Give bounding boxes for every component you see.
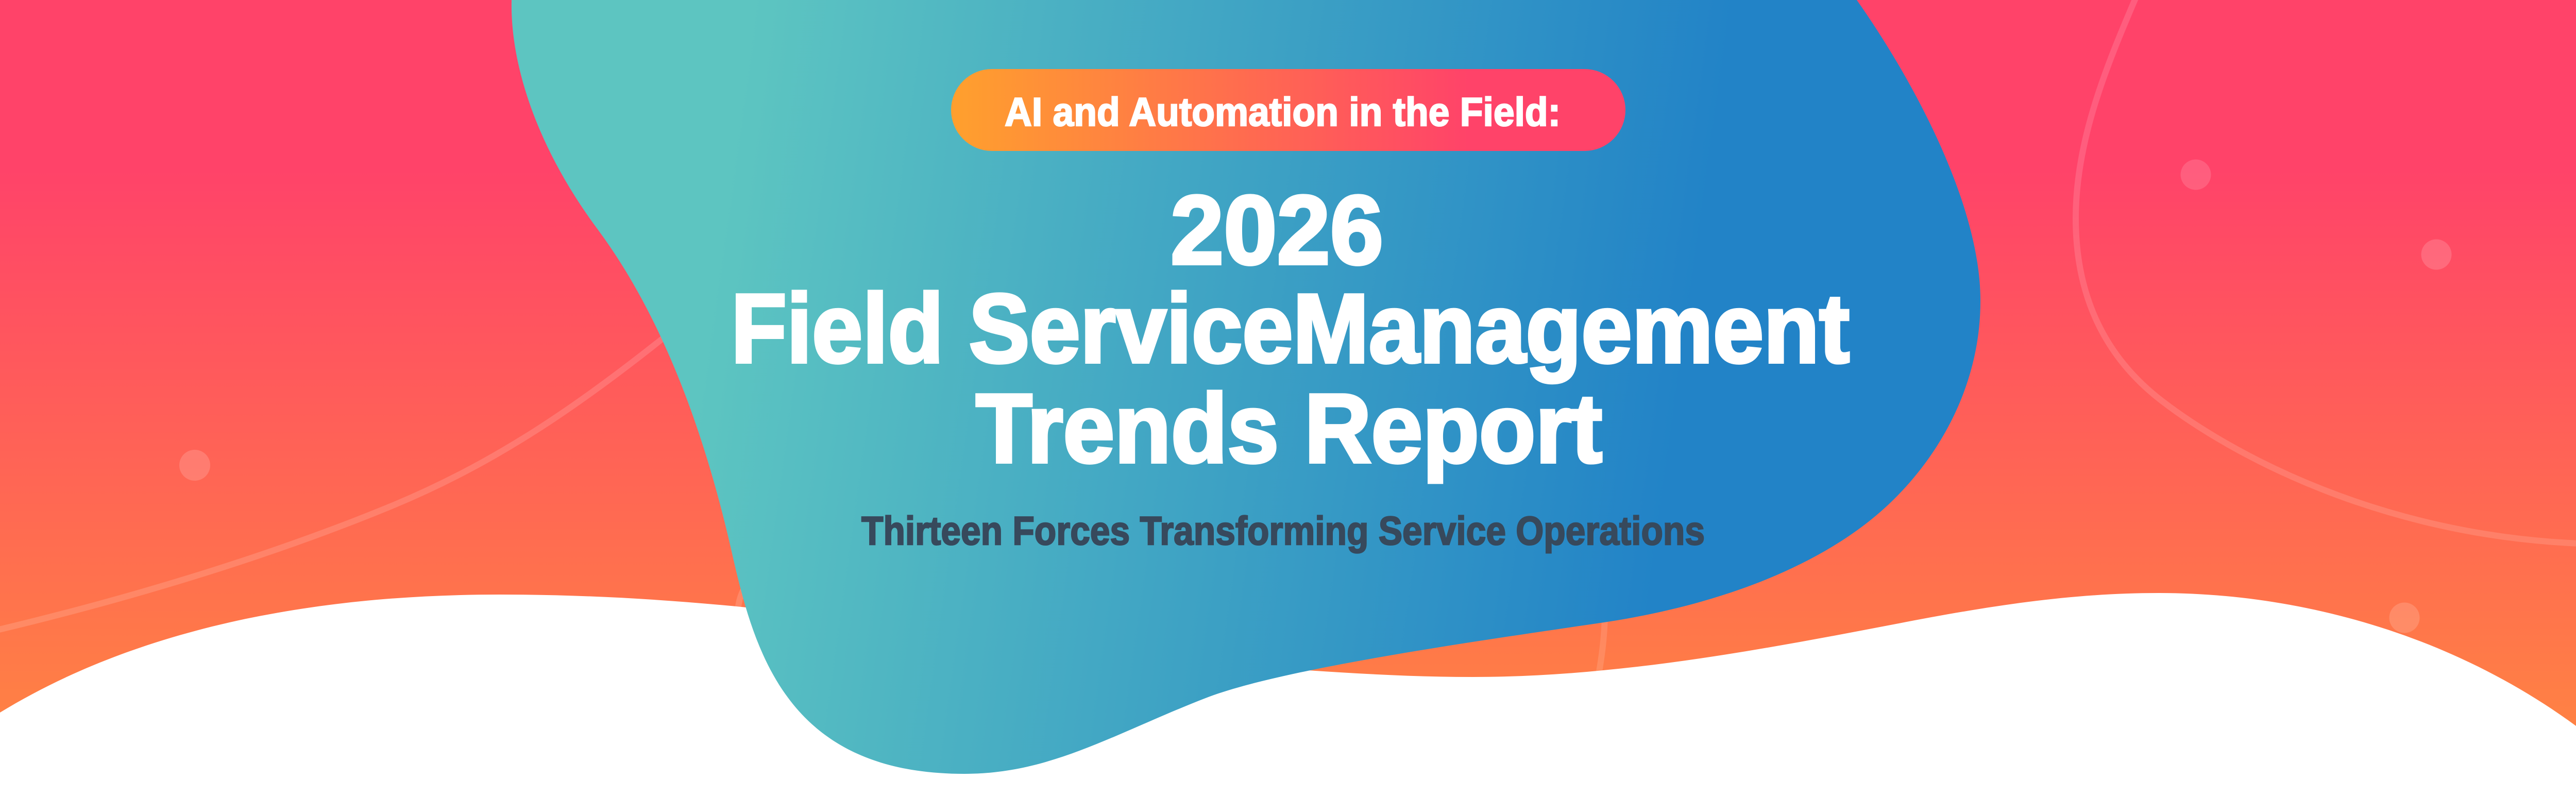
decorative line: small left segment: [738, 587, 744, 611]
pill badge: [951, 69, 1625, 151]
white wave: [0, 593, 2576, 796]
dot: lower right: [2389, 603, 2419, 633]
pill label: AI and Automation in the Field:: [1005, 89, 1561, 134]
decorative line: small lower segment: [1598, 616, 1605, 678]
decorative line: left curve: [0, 335, 667, 631]
dot: middle right: [2421, 239, 2451, 270]
main title: [731, 176, 1850, 483]
title line: year: 2026: [1171, 176, 1383, 285]
decorative line: right curve: [2076, 0, 2576, 544]
dot: left: [179, 450, 210, 481]
title line: trends report: Trends Report: [976, 374, 1602, 483]
dot: upper right: [2180, 160, 2211, 190]
subtitle: Thirteen Forces Transforming Service Operations: [861, 508, 1705, 553]
central gradient blob: [512, 0, 1980, 774]
title line: field service management: Field ServiceManagement: [731, 274, 1850, 383]
